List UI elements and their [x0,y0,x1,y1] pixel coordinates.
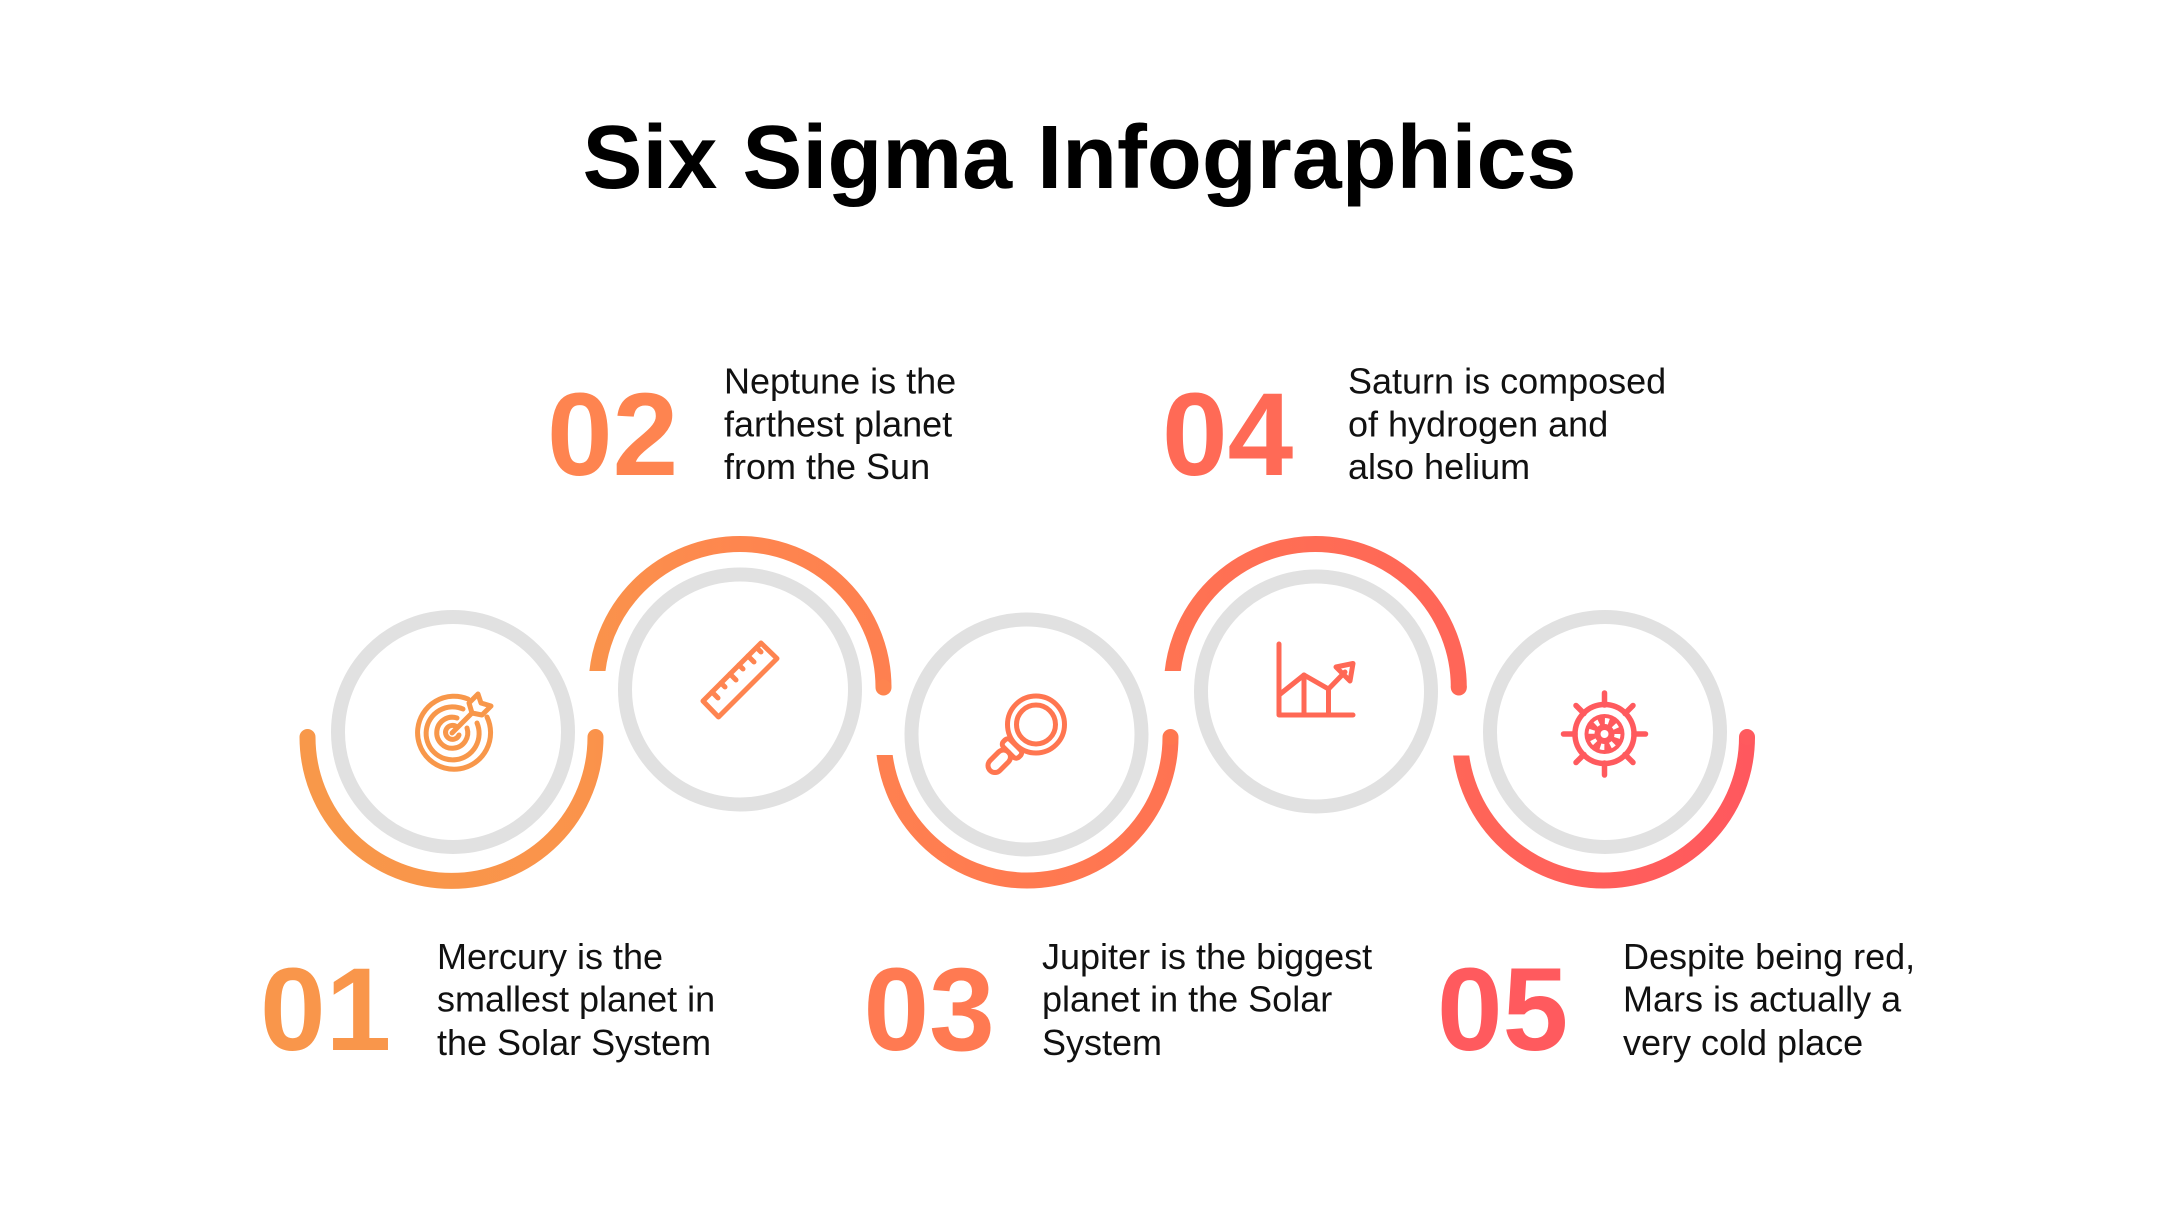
text block 02: farthest planet [724,404,952,444]
text block 03: System [1042,1022,1162,1063]
arc 02 [596,544,892,696]
text block 01: the Solar System [437,1022,711,1063]
icon: ship wheel [1564,693,1646,775]
text block 03: planet in the Solar [1042,978,1332,1020]
icon: target with arrow [418,694,491,769]
icon: ruler [703,643,777,717]
arc 04 [1172,544,1467,696]
text block 05: Despite being red, [1623,936,1915,977]
grey ring 01 [338,617,568,847]
text block 05: very cold place [1623,1022,1863,1063]
text block 01: Mercury is the [437,936,663,977]
icon: magnifier [982,696,1064,778]
grey ring 03 [912,620,1142,850]
grey ring 04 [1201,576,1431,806]
text block 04: of hydrogen and [1348,404,1608,444]
text block 02: from the Sun [724,446,930,487]
text block 03: Jupiter is the biggest [1042,936,1372,977]
icon: growth chart [1279,644,1353,715]
step 03 circle group [884,620,1178,880]
text block 04: also helium [1348,446,1530,487]
grey ring 05 [1490,617,1720,847]
grey ring 02 [625,574,855,804]
number 05: 05 [1437,944,1568,1076]
text block 01: smallest planet in [437,978,715,1020]
number 01: 01 [260,944,391,1076]
text block 02: Neptune is the [724,360,956,402]
step 05 circle group [1460,617,1755,880]
arc 05 [1460,729,1755,880]
number 03: 03 [864,944,995,1076]
text block 05: Mars is actually a [1623,978,1902,1020]
step 02 circle group [596,544,892,804]
text block 04: Saturn is composed [1348,360,1666,402]
number 02: 02 [547,369,678,501]
step 01 circle group [308,617,596,881]
arc 03 [884,729,1178,880]
arc 01 [308,737,596,881]
step 04 circle group [1172,544,1467,806]
title: Six Sigma Infographics [582,108,1577,208]
number 04: 04 [1162,369,1293,501]
